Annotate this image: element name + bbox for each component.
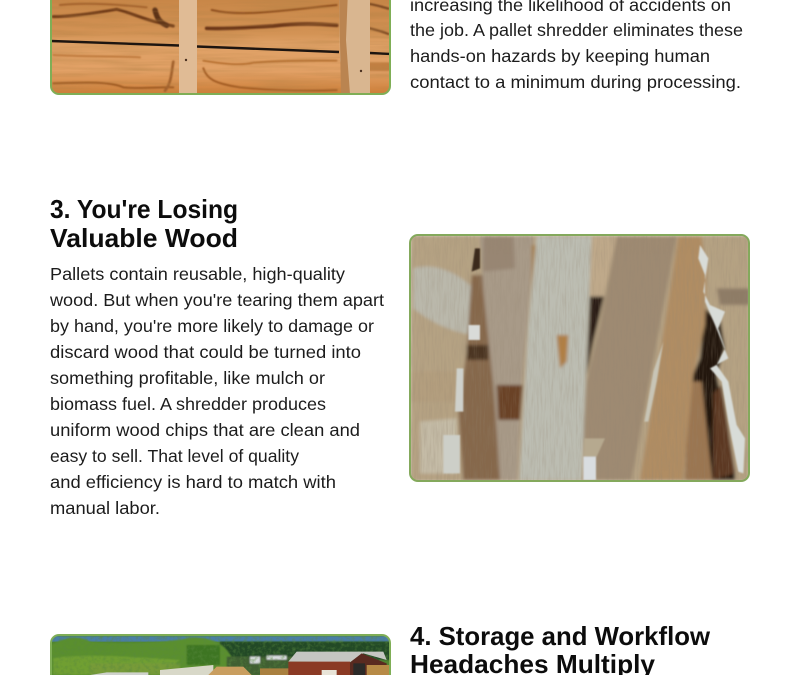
heading: section 4: 4. Storage and Workflow — [410, 621, 711, 651]
text block: section 3 body: uniform wood chips that are clean and — [50, 420, 360, 440]
text block: section 3 body: and efficiency is hard to match with — [50, 472, 336, 492]
text block: section 2 ending: the job. A pallet shredder eliminates these — [410, 20, 743, 40]
text block: section 3 body: easy to sell. That level of quality — [50, 446, 299, 466]
vertical posts — [179, 0, 197, 94]
photo: broken wooden pallet boards — [410, 235, 750, 482]
heading: section 4 — [410, 621, 711, 675]
text block: section 3 body: Pallets contain reusable, high-quality — [50, 264, 345, 284]
text block: section 2 ending: hands-on hazards by keeping human — [410, 46, 710, 66]
dark gap lines — [51, 41, 391, 54]
text block: section 3 body: by hand, you're more likely to damage or — [50, 316, 374, 336]
text block: section 2 ending: contact to a minimum during processing. — [410, 72, 741, 92]
heading: section 3: Valuable Wood — [50, 223, 238, 253]
heading: section 3: 3. You're Losing — [50, 194, 238, 224]
text block: section 3 body — [49, 264, 384, 518]
photo: wooden fence planks — [51, 0, 391, 94]
text block: section 2 ending — [410, 0, 743, 92]
photo: lumber yard with trees and barn — [50, 635, 390, 675]
text block: section 3 body: wood. But when you're tearing them apart — [49, 290, 384, 310]
heading: section 3 — [50, 194, 238, 253]
text block: section 3 body: biomass fuel. A shredder produces — [50, 394, 326, 414]
text block: section 3 body: discard wood that could be turned into — [50, 342, 361, 362]
text block: section 3 body: manual labor. — [50, 498, 160, 518]
text block: section 3 body: something profitable, like mulch or — [50, 368, 325, 388]
